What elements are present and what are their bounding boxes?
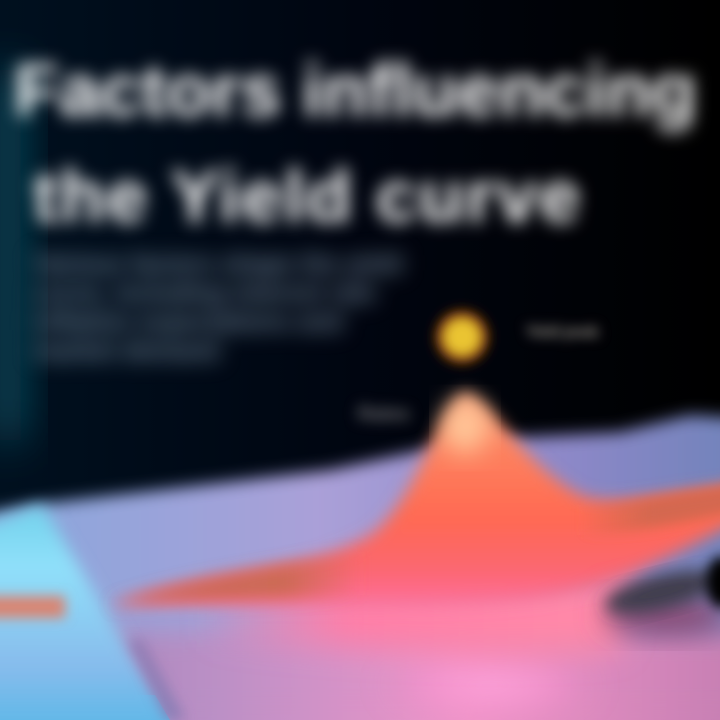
perspective floor bbox=[0, 415, 720, 720]
dark shadow blob bbox=[602, 561, 720, 623]
dark shadow core bbox=[706, 556, 720, 608]
lower pink-lilac floor bbox=[70, 630, 720, 720]
title line two: the Yield curve bbox=[33, 155, 582, 238]
teal edge glow bbox=[0, 70, 16, 440]
icon: yellow marker dot bbox=[442, 317, 482, 357]
pink band beneath curve bbox=[200, 570, 640, 654]
body text: Various factors shape the yield bbox=[34, 250, 402, 278]
orange streak across cyan panel bbox=[0, 596, 65, 618]
body text: market demand bbox=[34, 337, 219, 365]
icon: marker halo bbox=[435, 310, 489, 364]
pink glow on floor bbox=[380, 650, 600, 720]
lower floor base bbox=[150, 692, 720, 720]
cyan panel base bbox=[0, 695, 170, 720]
label beside mountain peak: Rates bbox=[358, 404, 410, 425]
dull orange right wing bbox=[580, 480, 720, 535]
dull orange left wing bbox=[110, 550, 360, 605]
yield curve mountain bbox=[110, 392, 720, 606]
body text bbox=[27, 244, 411, 372]
label beside marker: Yield peak bbox=[525, 322, 598, 341]
panel edge shadow bbox=[128, 640, 186, 720]
body text: curve, including interest rate bbox=[34, 279, 376, 307]
cyan floor panel bbox=[0, 505, 172, 720]
title line one: Factors influencing bbox=[14, 49, 697, 132]
body text: inflation expectations and bbox=[34, 308, 342, 336]
shadow mauve underside bbox=[603, 595, 720, 635]
mountain peak highlight bbox=[445, 404, 485, 452]
